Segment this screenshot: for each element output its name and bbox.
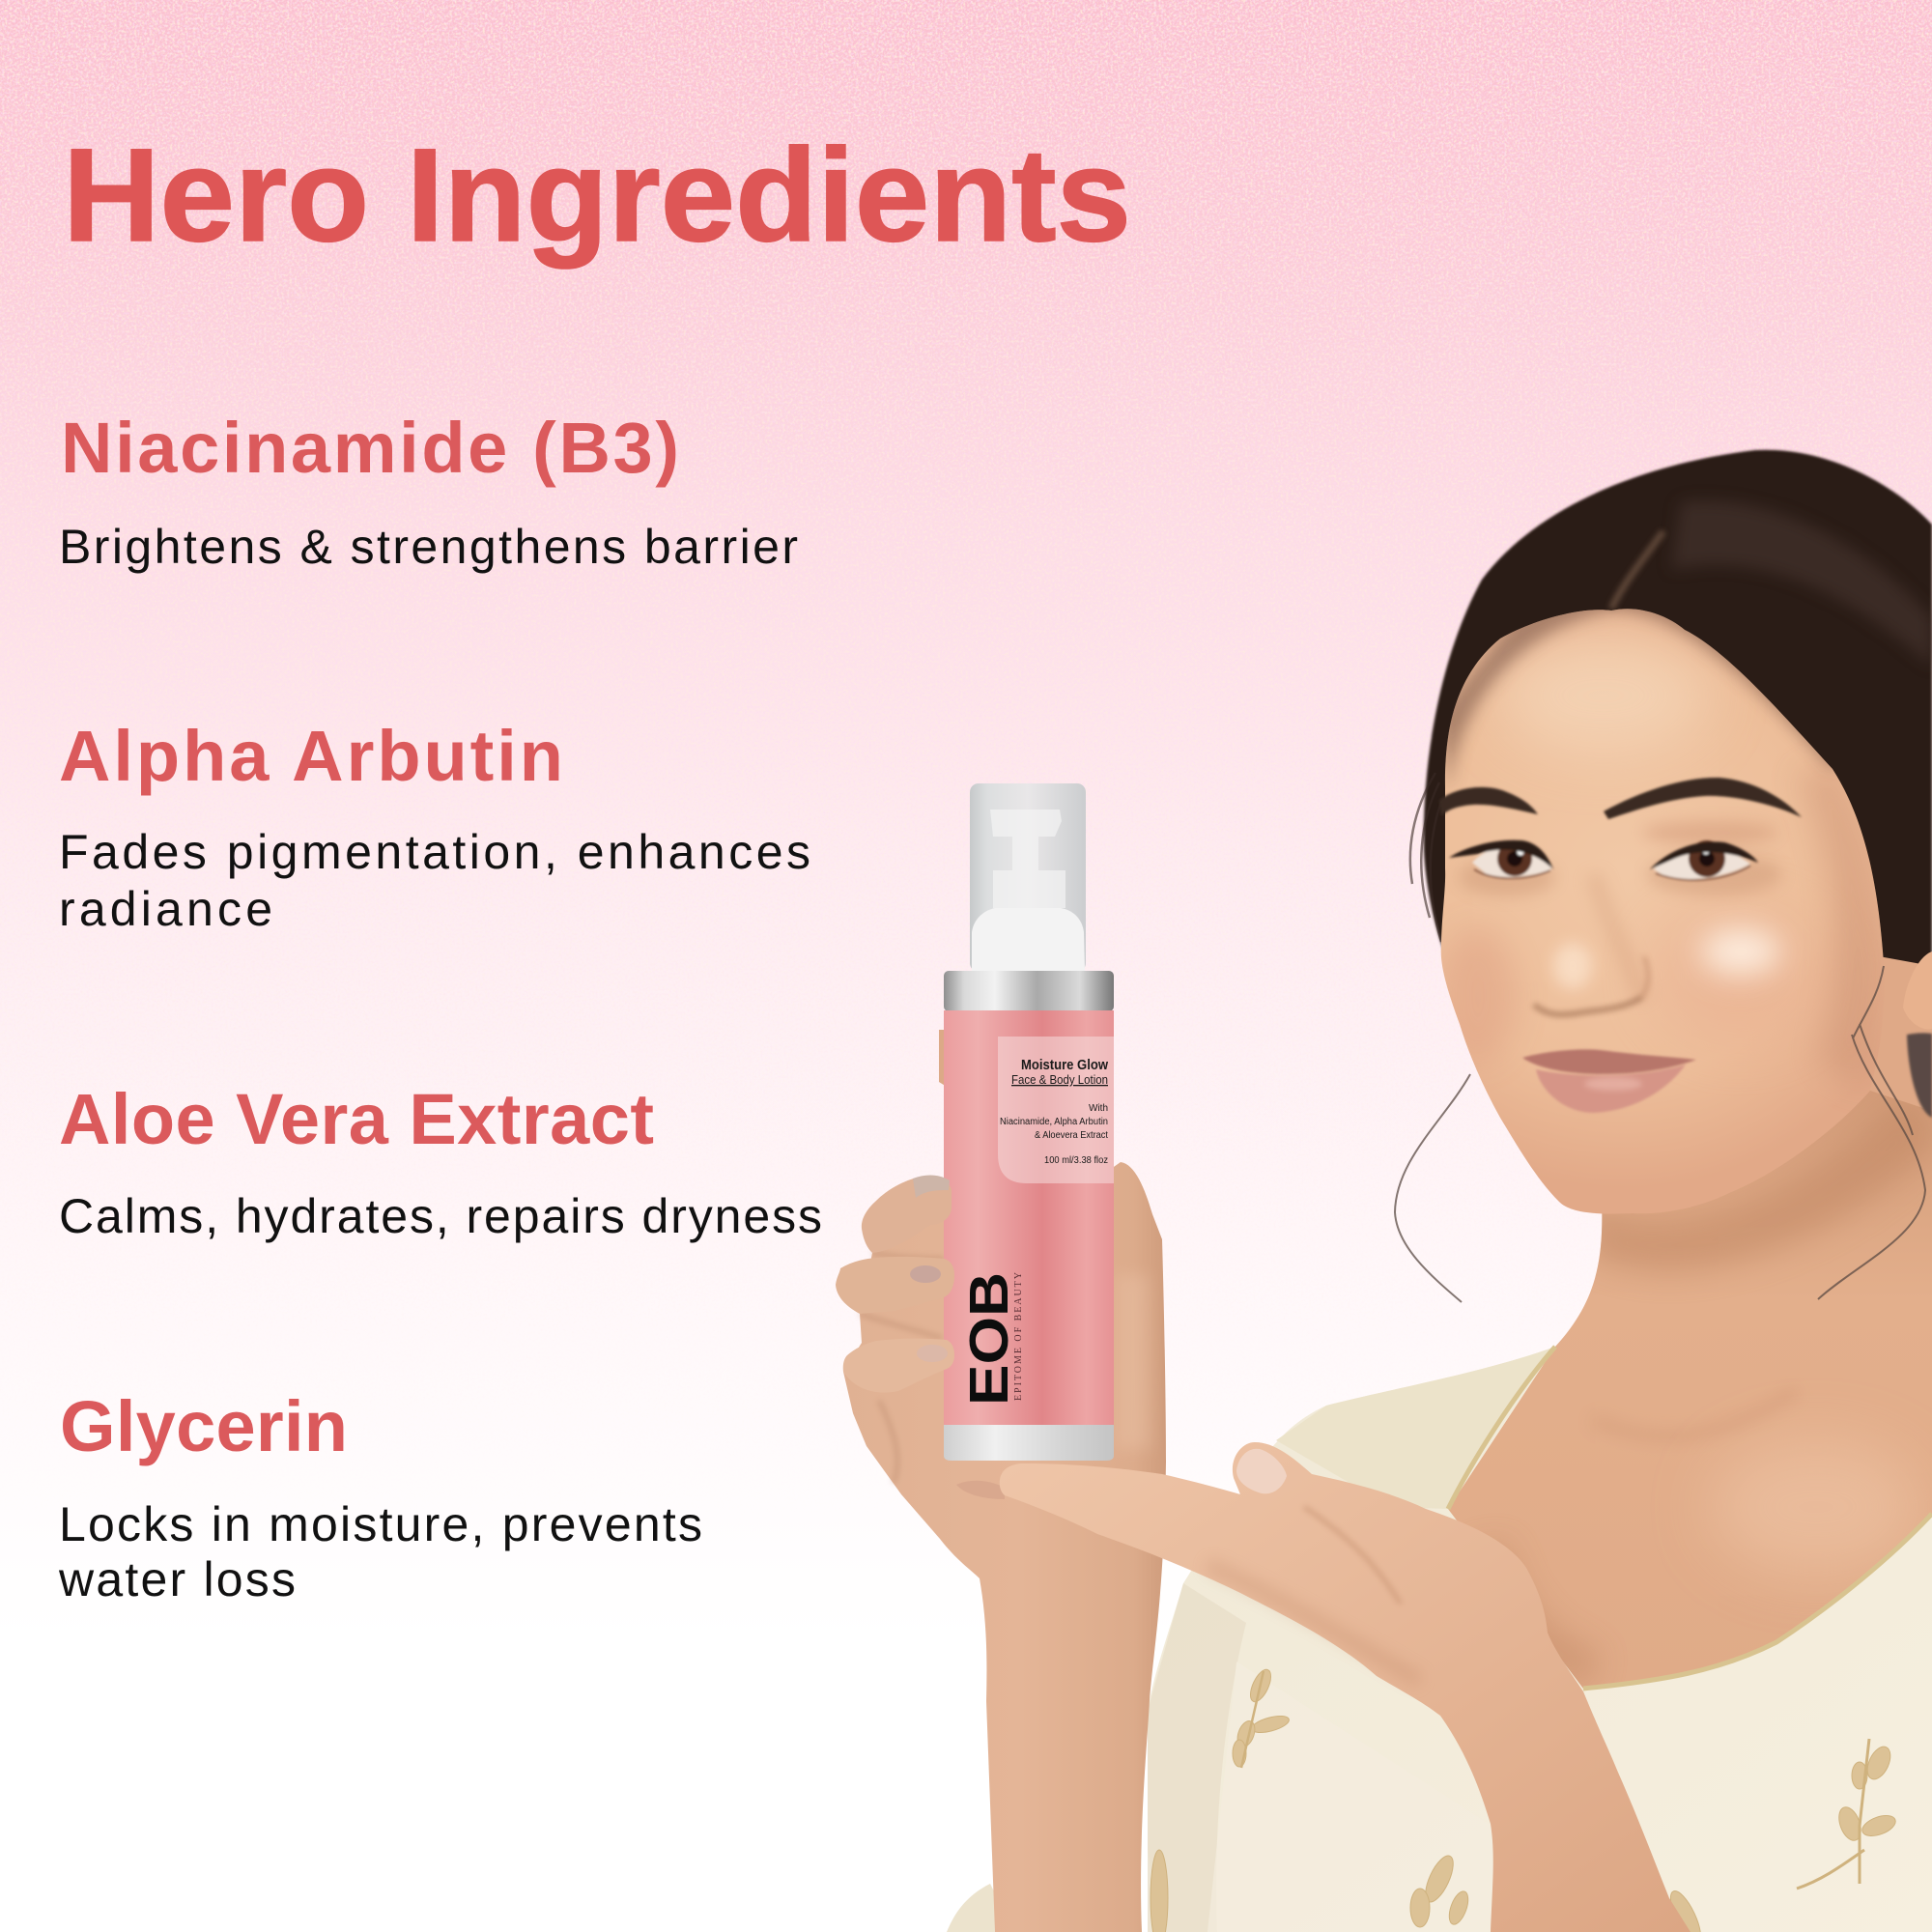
thumb nail bbox=[1236, 1449, 1287, 1493]
label panel bbox=[998, 1037, 1114, 1183]
background pink grain bbox=[0, 0, 1932, 495]
description: Aloe Vera Extract: Calms, hydrates, repairs dryness bbox=[59, 1189, 822, 1243]
label text: & Aloevera Extract bbox=[1035, 1130, 1108, 1141]
ring finger bbox=[843, 1339, 954, 1393]
eyebrow right bbox=[1604, 778, 1802, 819]
hair parting bbox=[1611, 531, 1663, 609]
description: Glycerin: Locks in moisture, prevents bbox=[59, 1497, 702, 1551]
metal base bbox=[944, 1425, 1114, 1461]
face bbox=[1439, 580, 1885, 1214]
heading: Niacinamide: Niacinamide (B3) bbox=[61, 408, 679, 488]
eye right bbox=[1650, 840, 1758, 880]
eyebrow left bbox=[1439, 787, 1538, 816]
title: Hero Ingredients bbox=[63, 122, 1131, 270]
ingredient: Aloe Vera Extract bbox=[59, 1079, 822, 1243]
hair back bbox=[1410, 450, 1932, 976]
ear bbox=[1903, 952, 1932, 1030]
description: Alpha Arbutin: Fades pigmentation, enhances bbox=[59, 825, 810, 879]
ingredient: Glycerin bbox=[58, 1386, 702, 1606]
logo EOB: EOB bbox=[958, 1272, 1020, 1406]
holding arm and palm bbox=[843, 1030, 1166, 1932]
product bottle bbox=[944, 783, 1114, 1461]
metal collar bbox=[944, 971, 1114, 1011]
label text bbox=[1000, 1058, 1109, 1166]
middle finger bbox=[836, 1257, 954, 1314]
heading: Glycerin: Glycerin bbox=[60, 1386, 348, 1466]
lower fingertip bbox=[956, 1481, 1005, 1499]
hair bun bbox=[1907, 1033, 1932, 1118]
description: Glycerin bbox=[58, 1497, 702, 1606]
background peach grain bbox=[0, 0, 1932, 624]
nose bbox=[1534, 956, 1648, 1014]
label text: Face & Body Lotion bbox=[1011, 1072, 1108, 1087]
skin below ear bbox=[1864, 956, 1932, 1130]
logo tagline: EPITOME OF BEAUTY bbox=[1013, 1272, 1024, 1401]
eye left bbox=[1449, 840, 1553, 878]
clear cap bbox=[970, 783, 1086, 972]
neck and chest bbox=[1448, 1091, 1932, 1689]
fingers holding bottle bbox=[836, 1175, 954, 1393]
ingredient: Alpha Arbutin bbox=[59, 716, 810, 936]
presenting hand and forearm bbox=[956, 1442, 1690, 1932]
heading: Alpha Arbutin: Alpha Arbutin bbox=[59, 716, 563, 796]
pink body bbox=[944, 1010, 1114, 1427]
description: Glycerin: water loss bbox=[58, 1552, 296, 1606]
ingredient: Niacinamide bbox=[59, 408, 798, 574]
loose hair strands bbox=[1395, 966, 1925, 1302]
cream kurta bbox=[947, 1347, 1932, 1932]
woman figure bbox=[836, 450, 1932, 1932]
heading: Aloe Vera Extract: Aloe Vera Extract bbox=[59, 1079, 654, 1159]
pump bbox=[972, 810, 1085, 972]
description: Alpha Arbutin bbox=[59, 825, 810, 936]
label text: 100 ml/3.38 floz bbox=[1044, 1155, 1108, 1166]
description: Niacinamide: Brightens & strengthens barrier bbox=[59, 520, 798, 574]
description: Alpha Arbutin: radiance bbox=[59, 882, 272, 936]
label text: With bbox=[1089, 1103, 1108, 1114]
label text: Niacinamide, Alpha Arbutin bbox=[1000, 1117, 1108, 1127]
index finger bbox=[862, 1175, 952, 1253]
lips bbox=[1522, 1049, 1696, 1113]
embroidery motifs bbox=[1151, 1666, 1898, 1932]
label text: Moisture Glow bbox=[1021, 1058, 1109, 1073]
